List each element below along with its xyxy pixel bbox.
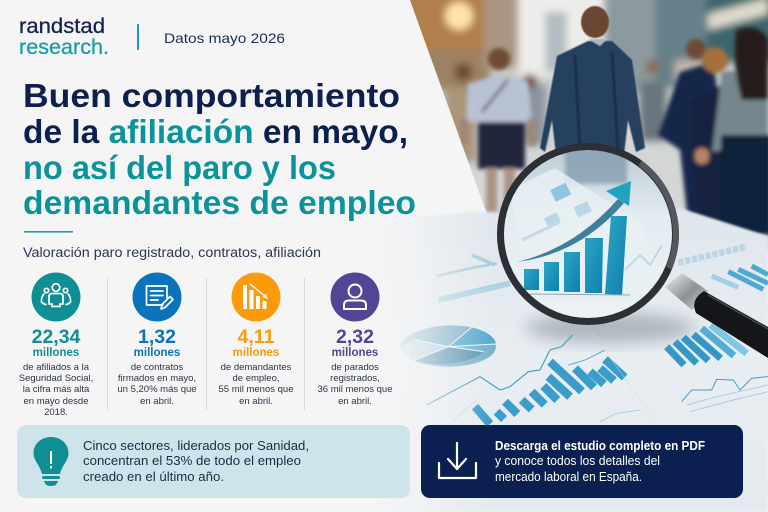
logo: randstad research <box>19 15 109 59</box>
icon: people group <box>32 272 80 322</box>
stat: afiliados: 2018. <box>44 407 68 418</box>
stat: demandantes: de demandantes <box>221 362 292 373</box>
stat: afiliados: Seguridad Social, <box>19 373 93 384</box>
divider bar beside logo <box>137 24 139 50</box>
stat: parados: 2,32 <box>336 326 374 348</box>
stat: parados: en abril. <box>338 396 372 407</box>
chart: line trends <box>427 332 768 423</box>
stat: afiliados: de afiliados a la <box>23 362 90 373</box>
stat: afiliados: millones <box>33 347 79 359</box>
stat: afiliados <box>19 272 93 418</box>
stat: parados: 36 mil menos que <box>318 384 392 395</box>
callout: sectors: creado en el último año. <box>83 469 224 484</box>
callout: sectors: concentran el 53% de todo el empleo <box>83 453 301 468</box>
callout: sectors <box>17 425 410 498</box>
chart: upper right bars <box>678 247 768 289</box>
logo: randstad research: research. <box>19 36 109 59</box>
stat: contratos <box>117 272 197 407</box>
stat: contratos: firmados en mayo, <box>118 373 196 384</box>
icon: light bulb <box>34 437 68 486</box>
stat: demandantes: de empleo, <box>232 373 280 384</box>
lens bars <box>524 216 627 295</box>
stat: contratos: millones <box>134 347 180 359</box>
stat: afiliados: la cifra más alta <box>23 384 90 395</box>
title: demandantes de empleo <box>23 185 416 222</box>
title: Buen comportamiento <box>23 78 400 115</box>
stat: parados: millones <box>332 347 378 359</box>
icon: falling bar chart <box>232 272 280 322</box>
logo: randstad research: randstad <box>19 15 105 38</box>
magnifier ring <box>500 146 676 322</box>
callout: sectors: Cinco sectores, liderados por Sanidad, <box>83 438 309 453</box>
stat: parados: de parados <box>331 362 379 373</box>
icon: document and pencil <box>132 272 182 322</box>
panel: key figures <box>19 272 392 418</box>
accent rule <box>24 231 73 233</box>
photo: crowd of professionals walking in a city <box>400 0 768 255</box>
chart: right skewed bars <box>667 325 747 365</box>
date label: Datos mayo 2026 <box>164 30 285 46</box>
chart: pie <box>401 325 496 367</box>
stat: contratos: en abril. <box>140 396 174 407</box>
title <box>23 78 416 222</box>
icon: magnifying glass with growth chart <box>500 145 768 358</box>
callout: download study <box>421 425 743 498</box>
panel: report sheets with charts <box>380 208 768 512</box>
stat: parados: registrados, <box>330 373 380 384</box>
callout: download study: mercado laboral en España. <box>495 469 642 484</box>
stat: contratos: un 5,20% más que <box>117 384 197 395</box>
icon: person <box>330 272 380 322</box>
callout: download study: Descarga el estudio completo en PDF <box>495 438 705 453</box>
chart: faded left bars <box>427 228 510 300</box>
title: de la afiliación en mayo, <box>23 114 408 151</box>
callout: download study: y conoce todos los detalles del <box>495 453 660 468</box>
stat: parados <box>318 272 392 407</box>
magnifier handle <box>665 273 768 358</box>
stat: afiliados: 22,34 <box>32 326 81 348</box>
subtitle: Valoración paro registrado, contratos, afiliación <box>23 245 321 260</box>
stat: demandantes <box>219 272 293 407</box>
title: no así del paro y los <box>23 150 336 187</box>
lens content <box>506 150 668 318</box>
stat: demandantes: 55 mil menos que <box>219 384 293 395</box>
stat: demandantes: 4,11 <box>238 326 275 348</box>
stat: contratos: 1,32 <box>138 326 176 348</box>
stat: demandantes: en abril. <box>239 396 273 407</box>
left panel fade over the sheets <box>350 200 490 512</box>
chart: centre skewed bars <box>475 359 625 424</box>
stat: afiliados: en mayo desde <box>24 396 88 407</box>
stat: contratos: de contratos <box>131 362 183 373</box>
lens arrow <box>517 181 631 262</box>
stat: demandantes: millones <box>233 347 279 359</box>
icon: download <box>439 443 476 478</box>
